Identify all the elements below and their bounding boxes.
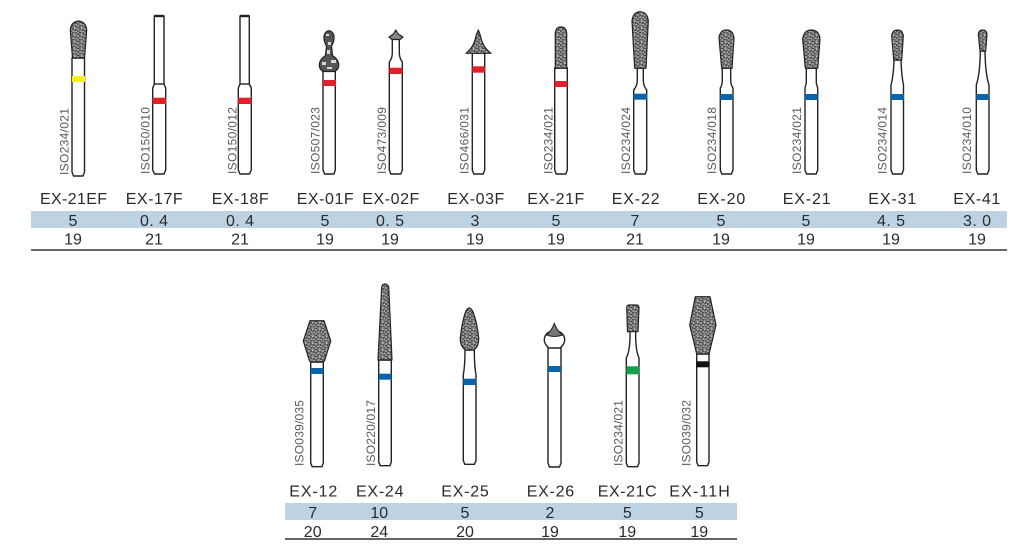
bottom row first values: 5: [461, 505, 470, 522]
head: [803, 30, 820, 68]
bur: EX-21C: [612, 305, 639, 467]
head: [466, 30, 491, 53]
top row model labels: EX-17F: [126, 191, 183, 208]
bur: EX-20: [705, 30, 734, 174]
head: [70, 21, 87, 58]
top row second values: [64, 232, 986, 248]
top row second values: 19: [381, 232, 399, 248]
top row model labels: EX-02F: [362, 191, 420, 208]
ISO code: ISO507/023: [308, 107, 322, 174]
bottom row first values: 7: [308, 505, 317, 522]
ISO code: ISO039/032: [679, 400, 693, 466]
top row model labels: EX-21F: [527, 191, 585, 208]
bur: EX-21EF: [57, 21, 87, 176]
bur: EX-22: [619, 12, 648, 174]
ISO code: ISO234/021: [57, 108, 71, 175]
bottom row table background band: [285, 503, 737, 520]
head: [555, 27, 567, 68]
color band: [310, 368, 324, 374]
ISO code: ISO234/021: [790, 107, 804, 174]
bottom row first values: 2: [546, 505, 555, 522]
bottom row model labels: EX-12: [289, 484, 337, 501]
bur: EX-17F: [138, 16, 166, 174]
bottom row second values: 19: [690, 524, 708, 541]
bottom row second values: 19: [541, 524, 559, 541]
bottom row first values: 10: [370, 505, 388, 522]
top row model labels: EX-20: [697, 191, 745, 208]
ISO code: ISO466/031: [457, 107, 471, 174]
bottom row model labels: EX-25: [441, 484, 489, 501]
color band: [152, 98, 166, 104]
bottom row model labels: EX-26: [527, 484, 574, 501]
head: [378, 284, 392, 360]
color band: [720, 94, 733, 100]
color band: [72, 76, 85, 82]
color band: [323, 80, 336, 86]
bottom row second values: 20: [304, 524, 322, 541]
top row second values: 19: [64, 232, 82, 248]
color band: [378, 374, 392, 380]
top row second values: 19: [882, 232, 900, 248]
top row second values: 19: [968, 232, 986, 248]
bur: EX-12: [292, 321, 331, 467]
top row first values: 5: [802, 213, 811, 230]
top row first values: [69, 213, 991, 230]
top row second values: 19: [797, 232, 815, 248]
head: [319, 31, 339, 72]
ISO code: ISO039/035: [292, 400, 306, 466]
head tip: [546, 323, 562, 336]
top row table background band: [31, 211, 1007, 228]
color band: [472, 66, 485, 73]
head: [460, 308, 479, 350]
top row model labels: EX-21EF: [40, 191, 107, 208]
top row first values: 5: [321, 213, 330, 230]
top row first values: 3: [471, 213, 480, 230]
head: [303, 321, 331, 362]
bottom row second values: 20: [456, 524, 474, 541]
bur: EX-31: [876, 30, 904, 174]
top row first values: 5: [69, 213, 78, 230]
head: [978, 30, 987, 51]
top row model labels: EX-22: [612, 191, 660, 208]
top row model labels: EX-18F: [212, 191, 269, 208]
bur: EX-21F: [541, 27, 568, 174]
bottom row model labels: EX-21C: [598, 484, 657, 501]
top row first values: 0. 4: [226, 213, 254, 230]
bottom row first values: 5: [695, 505, 704, 522]
bottom row model labels: EX-11H: [669, 484, 730, 501]
bottom row model labels: [289, 484, 730, 501]
top row second values: 19: [466, 232, 484, 248]
bur: EX-11H: [679, 297, 716, 466]
ISO code: ISO234/014: [876, 107, 890, 174]
top row model labels: EX-03F: [447, 191, 505, 208]
bottom row first values: [308, 505, 704, 522]
bottom row model labels: EX-24: [356, 484, 404, 501]
color band: [634, 94, 647, 100]
top row model labels: EX-01F: [297, 191, 354, 208]
bottom row second values: 19: [618, 524, 636, 541]
bur: EX-24: [364, 284, 392, 466]
color band: [626, 366, 639, 374]
color band: [891, 94, 904, 100]
head highlights: [322, 34, 336, 69]
ISO code: ISO234/018: [705, 107, 719, 174]
top row model labels: [40, 191, 1000, 208]
head: [690, 297, 716, 354]
ISO code: ISO150/012: [226, 107, 240, 174]
head ball: [544, 332, 565, 348]
top row second values: 19: [316, 232, 334, 248]
top row second values: 19: [547, 232, 565, 248]
color band: [548, 366, 561, 372]
head: [389, 30, 403, 40]
head: [632, 12, 648, 68]
ISO code: ISO150/010: [138, 107, 152, 174]
ISO code: ISO234/024: [619, 107, 633, 174]
top row model labels: EX-31: [868, 191, 916, 208]
bottom row second values: 24: [370, 524, 388, 541]
top row model labels: EX-21: [783, 191, 831, 208]
ISO code: ISO234/021: [541, 107, 555, 174]
top row second values: 21: [231, 232, 249, 248]
bur: EX-25: [460, 308, 479, 464]
top row first values: 4. 5: [877, 213, 905, 230]
bur: EX-18F: [226, 16, 252, 174]
head: [719, 30, 734, 68]
bur: EX-21: [790, 30, 820, 174]
color band: [463, 379, 476, 385]
top row first values: 7: [631, 213, 640, 230]
top row first values: 5: [552, 213, 561, 230]
top row second values: 19: [712, 232, 730, 248]
top row second values: 21: [626, 232, 644, 248]
top row second values: 21: [145, 232, 163, 248]
ISO code: ISO220/017: [364, 400, 378, 466]
head: [892, 30, 903, 60]
top row first values: 0. 5: [376, 213, 404, 230]
color band: [390, 68, 402, 74]
color band: [554, 81, 568, 87]
bur: EX-41: [960, 30, 989, 174]
color band: [238, 98, 252, 104]
head: [627, 305, 639, 332]
bottom row second values: [304, 524, 708, 541]
bur: EX-03F: [457, 30, 491, 174]
ISO code: ISO234/021: [612, 400, 626, 466]
bur: EX-26: [544, 323, 565, 467]
top row first values: 3. 0: [963, 213, 991, 230]
color band: [805, 94, 818, 100]
top row model labels: EX-41: [953, 191, 1000, 208]
color band: [696, 361, 710, 367]
color band: [976, 94, 989, 100]
top row first values: 5: [717, 213, 726, 230]
ISO code: ISO473/009: [375, 107, 389, 174]
top row first values: 0. 4: [140, 213, 168, 230]
bottom row first values: 5: [623, 505, 632, 522]
bur: EX-01F: [308, 31, 339, 174]
bur: EX-02F: [375, 30, 403, 174]
ISO code: ISO234/010: [960, 107, 974, 174]
